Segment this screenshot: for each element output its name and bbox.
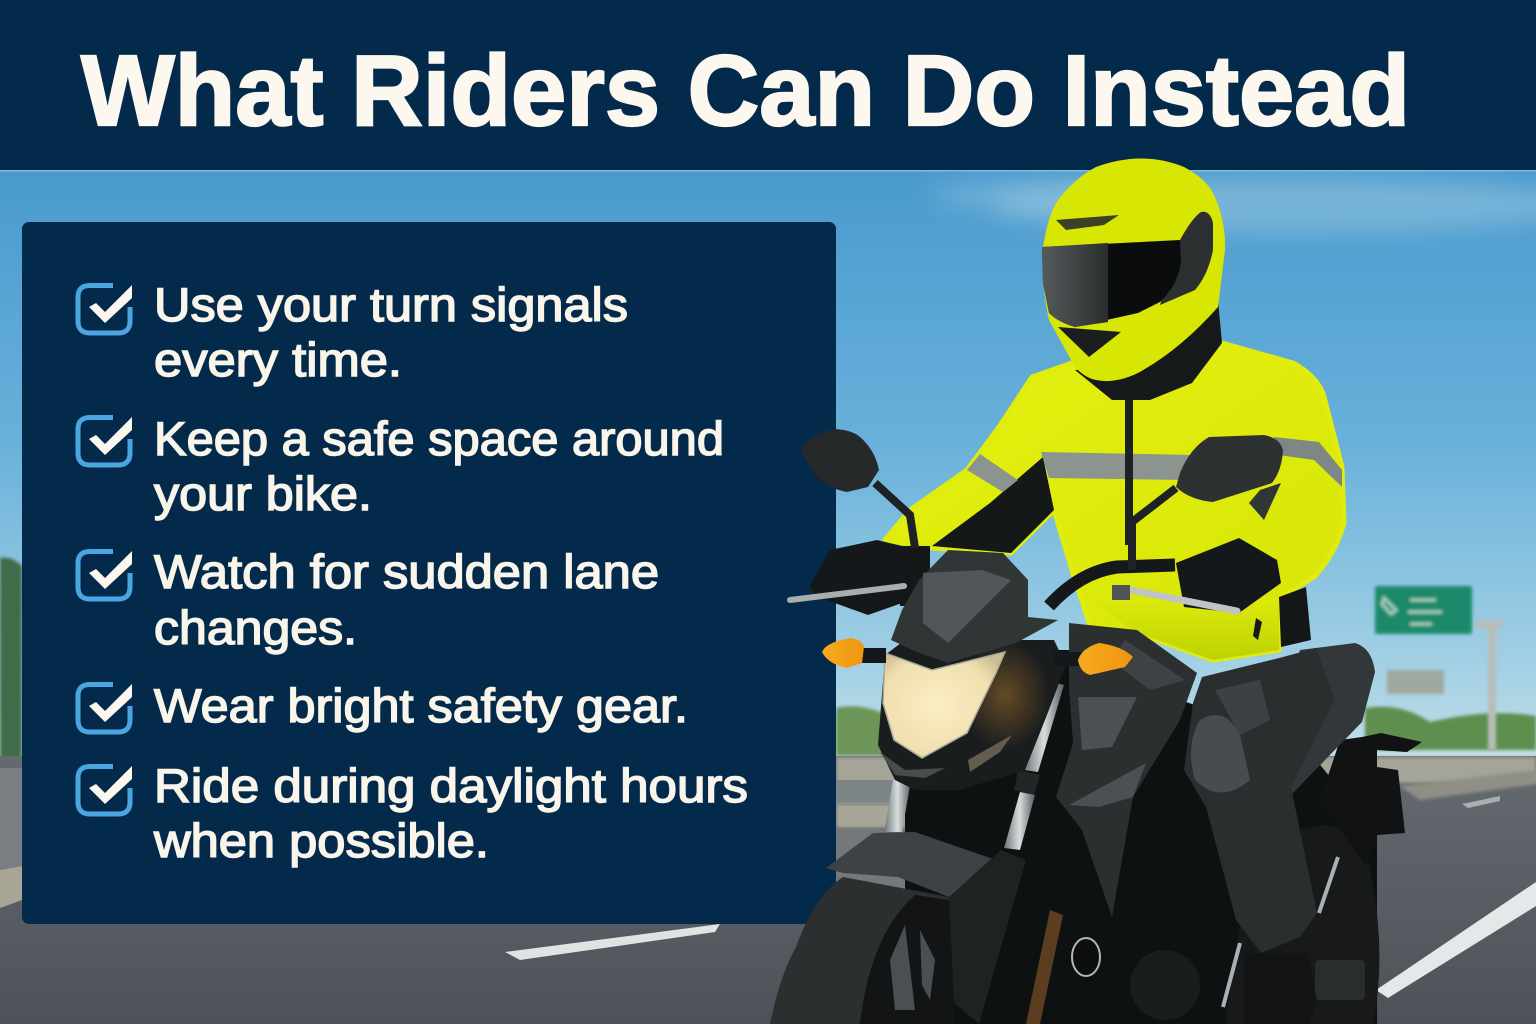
text: daylight hours: Ride during daylight hours [154, 759, 748, 812]
icon: check box [78, 684, 132, 732]
item: turn signals [78, 278, 628, 386]
visor [1042, 240, 1181, 327]
turn signals [822, 638, 1133, 675]
headlight [883, 652, 1005, 758]
mirror left [801, 429, 879, 492]
road sign [1375, 586, 1502, 750]
tank side panel [1056, 623, 1197, 917]
text: lane changes: changes. [154, 601, 357, 654]
jacket [885, 300, 1344, 660]
left glove [809, 540, 906, 615]
item: safety gear [78, 679, 688, 732]
text: daylight hours: when possible. [153, 814, 489, 867]
fairing and headlight housing [878, 550, 1066, 790]
item: safe space [78, 412, 724, 520]
text: turn signals: Use your turn signals [154, 278, 628, 331]
front forks [884, 683, 1064, 1024]
front tyre [770, 877, 954, 1024]
seat [1270, 643, 1375, 795]
rider leg [1184, 648, 1335, 953]
zipper [1125, 400, 1133, 545]
title: What Riders Can Do Instead [81, 35, 1410, 147]
helmet side port [1160, 212, 1213, 305]
mirror stems and levers [790, 483, 1237, 611]
mirror right [1176, 435, 1283, 502]
text: safety gear: Wear bright safety gear. [154, 679, 688, 732]
front fender [826, 832, 1001, 897]
item: daylight hours [78, 759, 748, 867]
black underarm [932, 457, 1054, 553]
panel: checklist [22, 222, 836, 924]
rider boot [1244, 953, 1317, 1024]
helmet [1042, 158, 1225, 381]
dark backing mass [905, 650, 1377, 1024]
collar [1075, 300, 1222, 400]
motorcycle and rider [770, 158, 1422, 1024]
text: turn signals: every time. [154, 333, 402, 386]
icon: check box [78, 766, 132, 814]
text: safe space: your bike. [154, 467, 372, 520]
side panel [1279, 587, 1311, 647]
reflective stripes [1041, 452, 1192, 480]
icon: check box [78, 417, 132, 465]
icon: check box [78, 285, 132, 333]
text: safe space: Keep a safe space around [154, 412, 724, 465]
item: lane changes [78, 545, 659, 654]
rear wheel [1223, 825, 1379, 1024]
handlebars [1049, 565, 1175, 606]
header band [0, 0, 1536, 172]
text: lane changes: Watch for sudden lane [154, 545, 659, 598]
tail and rear fender [1320, 733, 1422, 867]
right glove [1176, 538, 1281, 613]
icon: check box [78, 551, 132, 599]
left arm handlebar grip [900, 546, 930, 606]
radiator and fork lower [1026, 910, 1200, 1024]
